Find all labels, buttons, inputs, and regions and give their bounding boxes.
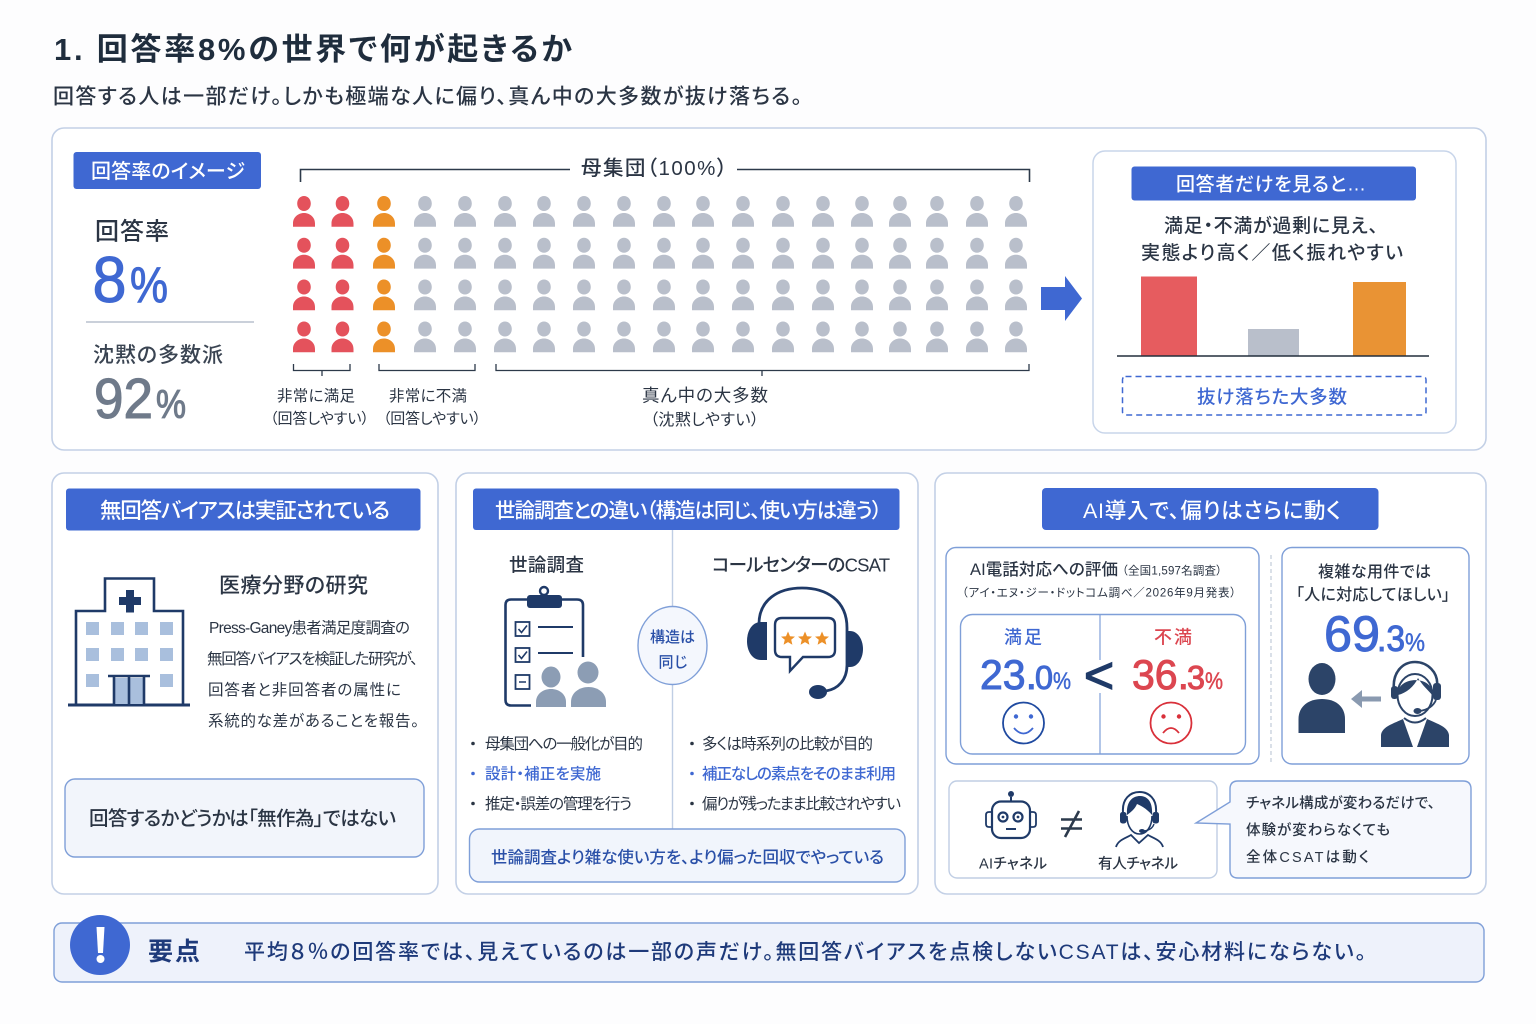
label: very satisfied: 非常に満足 <box>277 387 355 405</box>
stat: 69.3%: .3 <box>1377 618 1405 659</box>
text: research description: 無回答バイアスを検証した研究が、 <box>207 650 418 668</box>
heading: medical research: 医療分野の研究 <box>219 574 368 598</box>
panel: response rate image <box>52 128 1486 450</box>
bracket: population 100%: 母集団（100%） <box>581 157 727 180</box>
subtitle: 回答する人は一部だけ。しかも極端な人に偏り、真ん中の大多数が抜け落ちる。 <box>53 84 802 108</box>
list: CSAT characteristics <box>690 735 901 813</box>
callout: missing majority <box>1122 376 1426 415</box>
stat: dissatisfied 36.3%: 不満 <box>1154 628 1192 648</box>
icon: hospital <box>68 578 190 705</box>
bar chart <box>1117 276 1429 356</box>
text: complex issues <box>1296 563 1450 604</box>
heading: non-response bias: 無回答バイアスは実証されている <box>100 499 390 523</box>
list: CSAT characteristics: 補正なしの素点をそのまま利用 <box>702 765 896 783</box>
text: research description <box>207 619 419 730</box>
label: very satisfied: （回答しやすい） <box>270 410 369 428</box>
panel: AI channel vs human channel <box>949 781 1217 878</box>
label: very dissatisfied <box>379 364 481 428</box>
text: complex issues: 「人に対応してほしい」 <box>1296 586 1450 604</box>
text: respondents description: 満足・不満が過剰に見え、 <box>1164 215 1378 237</box>
text: research description: 系統的な差があることを報告。 <box>208 712 419 730</box>
heading: response rate image: 回答率のイメージ <box>91 159 245 183</box>
stat: silent majority 92%: % <box>156 383 186 427</box>
stat: silent majority 92% <box>93 344 223 431</box>
stat: silent majority 92%: 92 <box>94 367 153 431</box>
icon: robot <box>986 791 1036 838</box>
bracket: population 100% <box>300 157 1030 182</box>
stat: response rate 8%: % <box>130 257 168 313</box>
icon: exclamation <box>70 915 130 975</box>
icon: human operator <box>1116 792 1163 847</box>
callout: channel mix: チャネル構成が変わるだけで、 <box>1246 794 1435 812</box>
list: CSAT characteristics: 多くは時系列の比較が目的 <box>702 735 873 753</box>
heading: response rate image <box>74 152 261 189</box>
icon: smiley face <box>1003 702 1044 744</box>
label: middle majority: （沈黙しやすい） <box>650 411 759 429</box>
text: survey title: AI電話対応への評価 <box>970 560 1118 579</box>
stat: response rate 8%: 回答率 <box>95 218 169 246</box>
icon: customer <box>1298 663 1345 733</box>
comparison symbol: < <box>1084 647 1114 705</box>
stat: 69.3% <box>1324 606 1425 662</box>
list: opinion poll characteristics <box>471 735 643 813</box>
label: very satisfied <box>270 364 369 428</box>
stat: satisfied 23.0%: 23. <box>980 651 1037 698</box>
badge: same structure: 同じ <box>658 654 688 671</box>
icon: frowning face <box>1150 702 1192 744</box>
stat: silent majority 92%: 沈黙の多数派 <box>93 344 223 367</box>
callout: rougher use: 世論調査より雑な使い方を、より偏った回収でやっている <box>491 848 884 867</box>
stat: response rate 8%: 8 <box>92 243 126 316</box>
stat: satisfied 23.0% <box>980 628 1071 698</box>
text: research description: 回答者と非回答者の属性に <box>208 681 401 699</box>
callout: not random: 回答するかどうかは「無作為」ではない <box>89 807 396 830</box>
stat: satisfied 23.0%: 満足 <box>1004 628 1042 648</box>
icon: human agent <box>1381 662 1449 747</box>
heading: AI adoption <box>1042 488 1378 530</box>
text: complex issues: 複雑な用件では <box>1318 563 1431 581</box>
heading: call center CSAT: コールセンターのCSAT <box>712 554 890 576</box>
heading: difference from opinion polls: 世論調査との違い（構造は同じ、使い方は違う） <box>495 500 882 522</box>
badge: same structure: 構造は <box>650 628 695 646</box>
heading: opinion poll: 世論調査 <box>509 554 584 576</box>
callout: not random <box>65 779 424 857</box>
label: middle majority: 真ん中の大多数 <box>642 386 768 406</box>
heading: difference from opinion polls <box>473 488 900 530</box>
badge: same structure <box>638 606 707 684</box>
text: key point message: 平均８％の回答率では、見えているのは一部の声だけ。無回答バイアスを点検しないCSATは、安心材料にならない。 <box>244 940 1366 964</box>
panel: respondents only <box>1093 151 1456 433</box>
panel: AI adoption <box>935 473 1486 894</box>
arrow: human preference <box>1351 690 1381 708</box>
label: human channel: 有人チャネル <box>1098 856 1178 872</box>
icon: clipboard and people <box>506 587 606 707</box>
text: respondents description <box>1141 215 1403 264</box>
list: opinion poll characteristics: 推定・誤差の管理を行う <box>485 795 632 813</box>
text: research description: Press-Ganey患者満足度調査の <box>209 619 410 637</box>
label: AI channel: AIチャネル <box>979 856 1047 872</box>
stat: 69.3%: % <box>1405 629 1425 657</box>
text: survey title <box>962 560 1236 600</box>
panel: non-response bias <box>52 473 438 894</box>
arrow <box>1041 276 1082 321</box>
panel: prefer a human for complex issues <box>1282 548 1469 764</box>
panel: difference from opinion polls <box>456 473 918 894</box>
panel: AI phone evaluation <box>946 548 1259 764</box>
stat: dissatisfied 36.3%: 3 <box>1187 659 1205 696</box>
list: opinion poll characteristics: 母集団への一般化が目的 <box>485 735 643 753</box>
text: respondents description: 実態より高く／低く振れやすい <box>1141 242 1403 264</box>
callout: missing majority: 抜け落ちた大多数 <box>1197 386 1347 408</box>
label: middle majority <box>496 364 1029 429</box>
text: survey title: （全国1,597名調査） <box>1122 564 1222 578</box>
stat: dissatisfied 36.3%: 36. <box>1132 651 1189 698</box>
stat: satisfied 23.0%: 0 <box>1035 659 1053 696</box>
list: opinion poll characteristics: 設計・補正を実施 <box>485 765 601 783</box>
callout: channel mix: 体験が変わらなくても <box>1246 821 1390 839</box>
heading: non-response bias <box>66 488 420 530</box>
callout: channel mix: 全体CSATは動く <box>1246 849 1369 866</box>
pictogram: silent majority <box>414 196 1027 352</box>
heading: respondents only: 回答者だけを見ると… <box>1176 172 1366 196</box>
pictogram: very satisfied respondents <box>293 196 354 352</box>
heading: respondents only <box>1132 166 1416 200</box>
list: CSAT characteristics: 偏りが残ったまま比較されやすい <box>702 795 901 813</box>
icon: headset with rating bubble <box>747 588 863 699</box>
stat: dissatisfied 36.3%: % <box>1205 668 1223 695</box>
title: 1. 回答率8%の世界で何が起きるか <box>54 32 572 67</box>
label: key point: 要点 <box>148 938 200 966</box>
label: very dissatisfied: （回答しやすい） <box>383 410 481 428</box>
pictogram: very dissatisfied respondents <box>373 196 395 352</box>
not-equal symbol <box>1061 811 1082 837</box>
text: survey title: （アイ・エヌ・ジー・ドットコム調べ／2026年9月発表） <box>962 586 1236 600</box>
stat: 69.3%: 69 <box>1324 606 1380 662</box>
callout: rougher use <box>470 829 905 882</box>
stat: response rate 8% <box>92 218 169 316</box>
stat: satisfied 23.0%: % <box>1053 668 1071 695</box>
heading: AI adoption: AI導入で、偏りはさらに動く <box>1083 499 1341 523</box>
stat: dissatisfied 36.3% <box>1132 628 1223 698</box>
key takeaway bar <box>54 915 1484 982</box>
label: very dissatisfied: 非常に不満 <box>389 387 467 405</box>
callout: channel mix <box>1196 781 1471 878</box>
